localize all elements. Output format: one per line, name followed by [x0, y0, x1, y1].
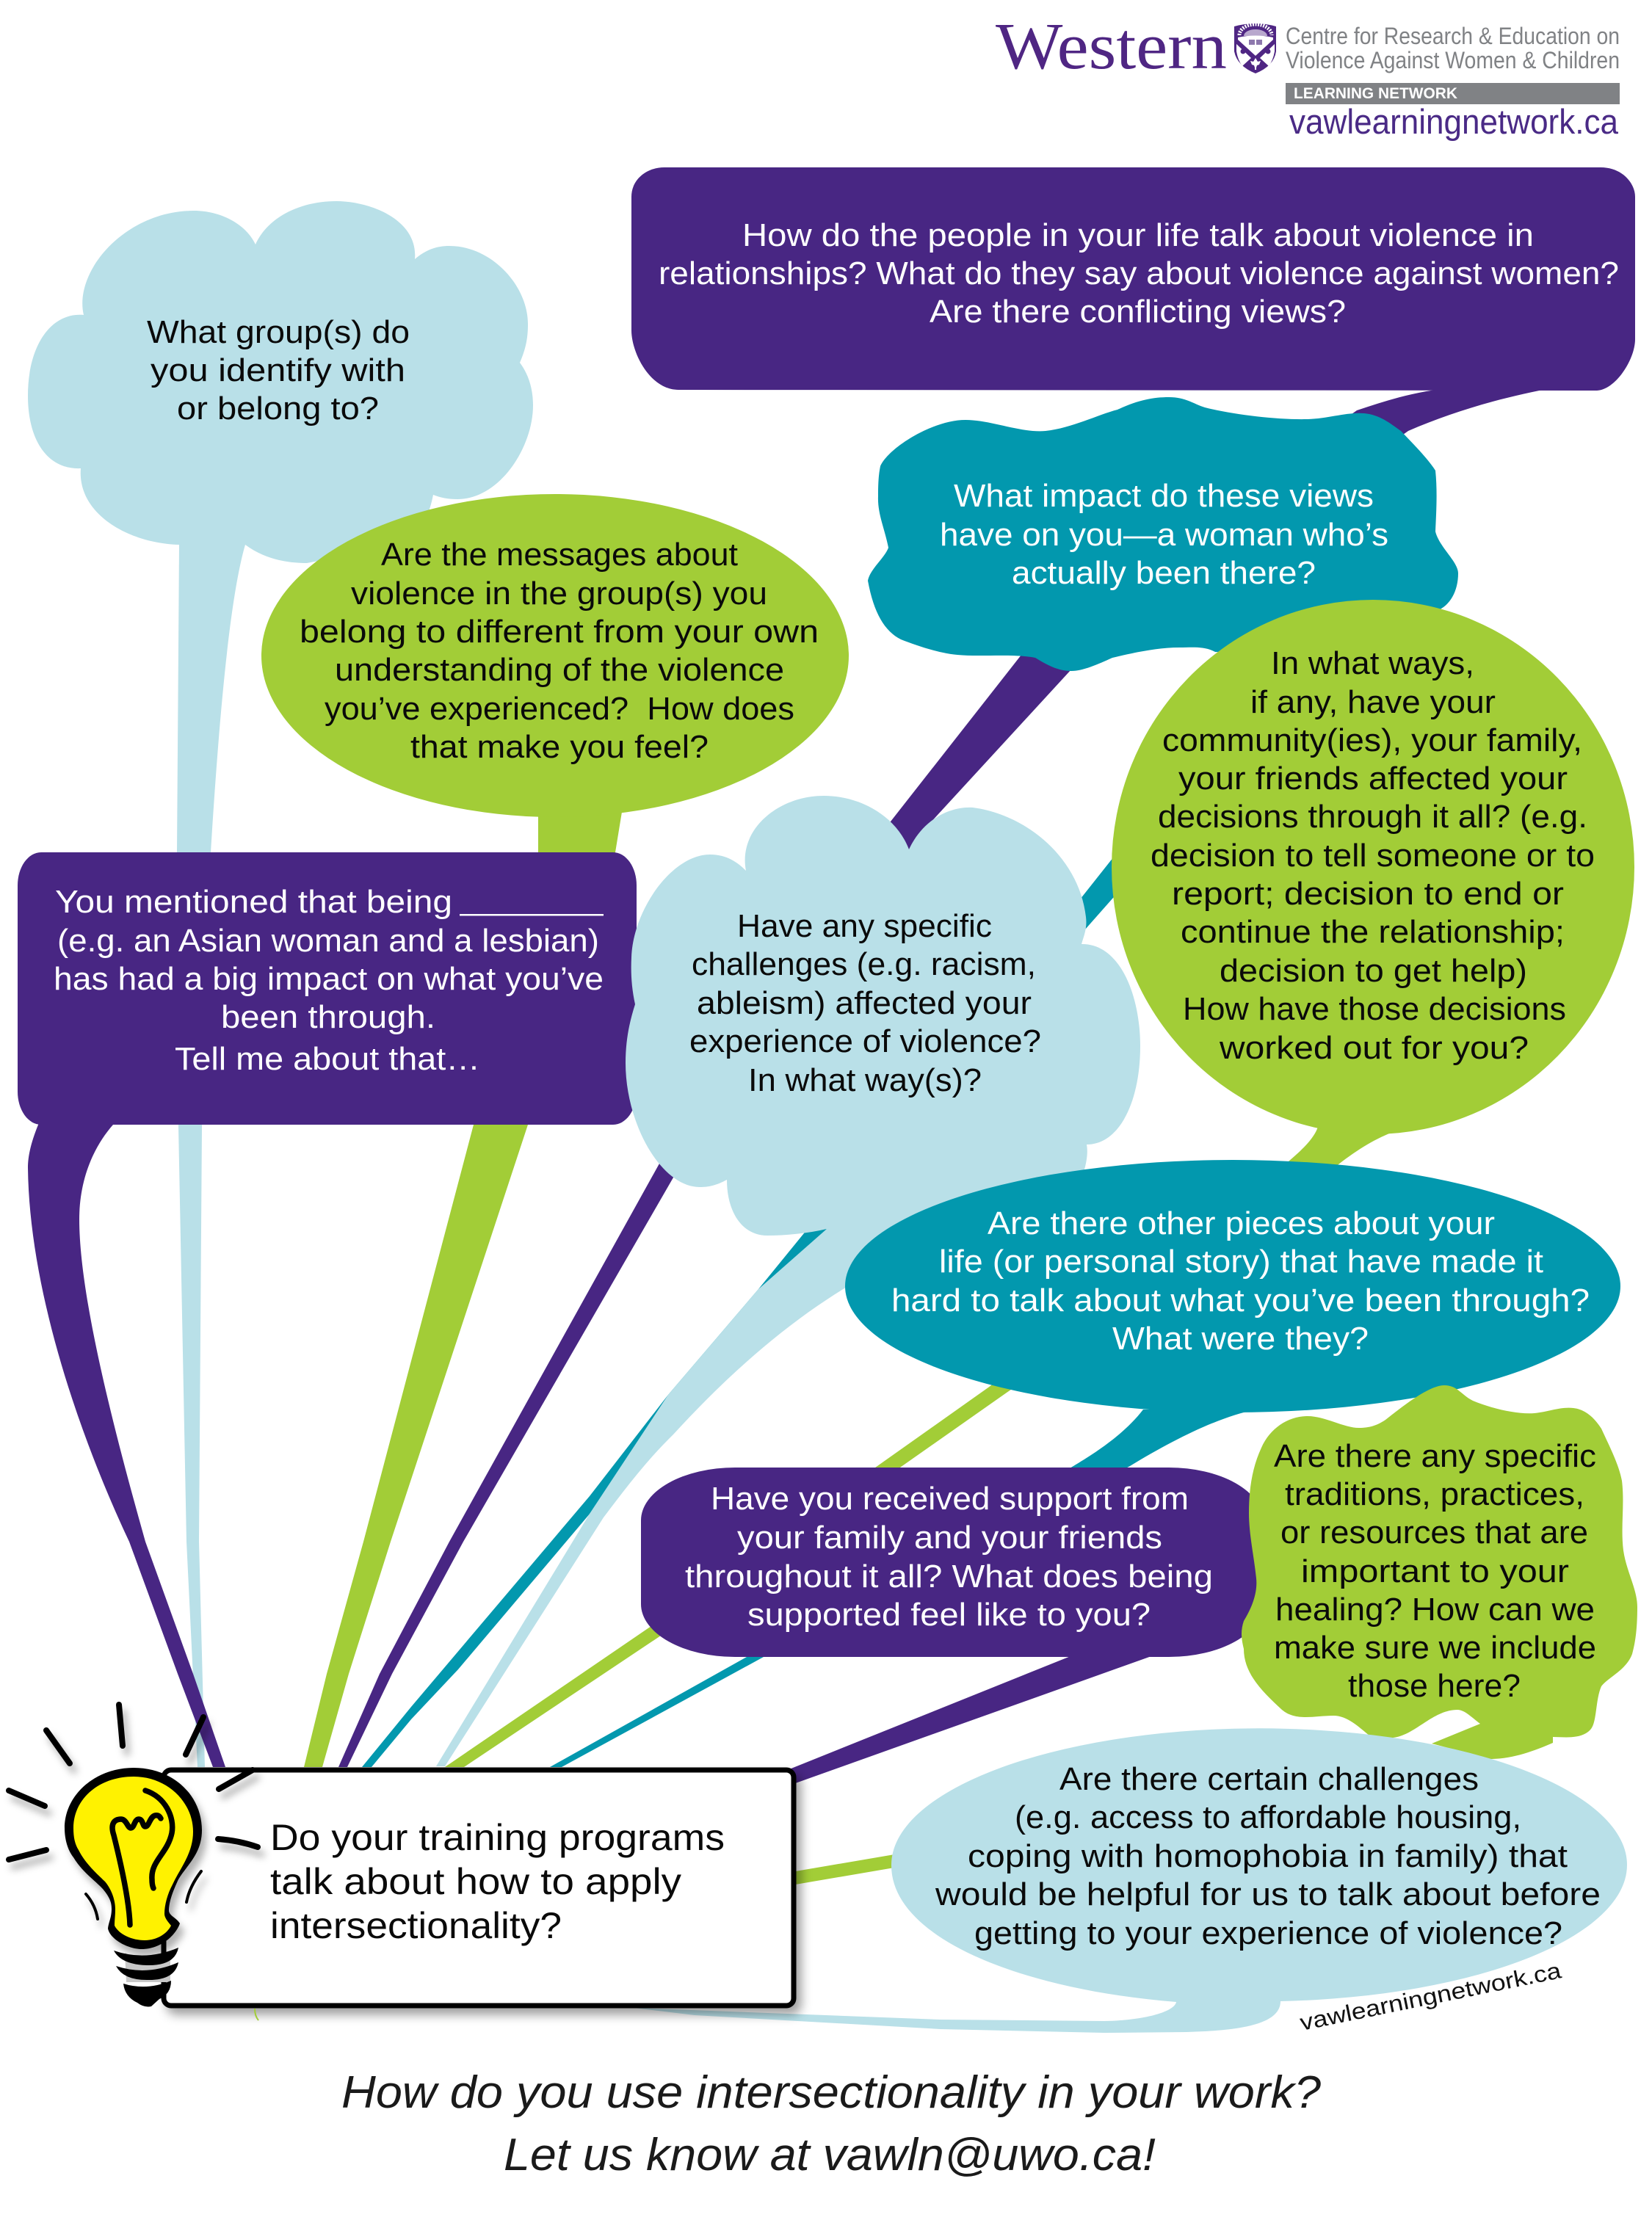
- text: has had a big impact on what you’ve: [54, 961, 604, 997]
- logo: Western University and Learning Network: [996, 10, 1620, 141]
- text: your family and your friends: [737, 1520, 1162, 1556]
- text: Have you received support from: [711, 1481, 1189, 1517]
- blob shape: [868, 397, 1458, 671]
- tail: green from traditions blob to box: [778, 1844, 954, 1887]
- text: hard to talk about what you’ve been through?: [891, 1283, 1590, 1318]
- text: How do the people in your life talk about violence in: [742, 217, 1534, 253]
- panel: blob, traditions: [1242, 1385, 1637, 1759]
- text: violence in the group(s) you: [351, 576, 767, 612]
- filament: [112, 1791, 173, 1925]
- text: you’ve experienced? How does: [325, 691, 794, 727]
- text: report; decision to end or: [1172, 876, 1564, 912]
- text: traditions, practices,: [1285, 1476, 1584, 1512]
- text: centre name: Violence Against Women & Children: [1286, 47, 1620, 73]
- text: actually been there?: [1012, 555, 1316, 591]
- tail: purple from support box to main box: [789, 1652, 1164, 1785]
- website, rotated: vawlearningnetwork.ca: [1297, 1957, 1564, 2036]
- text: [1274, 1438, 1596, 1704]
- blob shape: [1242, 1385, 1637, 1759]
- text: those here?: [1348, 1668, 1521, 1704]
- text: decision to tell someone or to: [1151, 838, 1595, 874]
- text: relationships? What do they say about violence against women?: [659, 255, 1619, 291]
- text: make sure we include: [1274, 1630, 1596, 1666]
- text: getting to your experience of violence?: [974, 1915, 1562, 1951]
- bulb glass outline: [65, 1768, 202, 1949]
- box outline: [164, 1770, 794, 2006]
- text: life (or personal story) that have made it: [939, 1244, 1543, 1280]
- tail: teal from impact bubble to box: [362, 697, 1285, 1767]
- text: [54, 884, 604, 1077]
- text: [270, 1817, 725, 1946]
- text: understanding of the violence: [335, 652, 784, 688]
- text: have on you—a woman who’s: [940, 517, 1388, 553]
- bulb glass fill: [73, 1777, 193, 1940]
- text: community(ies), your family,: [1162, 722, 1582, 758]
- text: centre name: Centre for Research & Education on: [1286, 23, 1620, 49]
- text: you identify with: [151, 352, 405, 388]
- circle shape: [1112, 600, 1634, 1134]
- text: talk about how to apply: [270, 1861, 681, 1902]
- text: or belong to?: [177, 391, 379, 427]
- text: centre name: [1286, 23, 1620, 73]
- text: decisions through it all? (e.g.: [1158, 799, 1587, 835]
- banner: learning network: [1286, 83, 1620, 104]
- text: What impact do these views: [954, 478, 1374, 514]
- text: What group(s) do: [147, 314, 410, 350]
- small green stroke below box: [255, 2009, 258, 2020]
- rounded box: [631, 167, 1635, 391]
- text: important to your: [1301, 1553, 1569, 1589]
- panel: cloud, specific challenges: [436, 796, 1140, 1766]
- text: healing? How can we: [1275, 1592, 1595, 1628]
- panel: main question box: [164, 1770, 794, 2020]
- icon: light bulb: [9, 1705, 258, 2006]
- panel: rounded box, support: [641, 1468, 1263, 1657]
- text: Tell me about that…: [175, 1041, 480, 1077]
- tail: green from decisions circle to box: [445, 1127, 1395, 1767]
- text: [300, 537, 819, 765]
- text: In what way(s)?: [748, 1062, 982, 1098]
- text: [935, 1761, 1601, 1951]
- icon: university crest: [1234, 23, 1276, 73]
- text: Do your training programs: [270, 1817, 725, 1858]
- text: that make you feel?: [410, 729, 709, 765]
- text: Are there conflicting views?: [930, 294, 1346, 330]
- text: decision to get help): [1220, 953, 1527, 989]
- cloud shape with tail: [28, 201, 533, 1767]
- text: [1151, 645, 1595, 1066]
- text: [659, 217, 1619, 330]
- text: Are there any specific: [1274, 1438, 1596, 1474]
- text: supported feel like to you?: [747, 1597, 1151, 1633]
- text: continue the relationship;: [1181, 914, 1565, 950]
- closing call to action: Let us know at vawln@uwo.ca!: [504, 2130, 1156, 2180]
- panel: box, you mentioned: [18, 852, 637, 1125]
- text: belong to different from your own: [300, 614, 819, 650]
- text: ableism) affected your: [697, 985, 1032, 1021]
- panel: ellipse, certain challenges: [634, 1728, 1627, 2033]
- text: challenges (e.g. racism,: [692, 946, 1036, 982]
- text: [689, 908, 1041, 1098]
- rounded box: [641, 1468, 1263, 1657]
- text: if any, have your: [1250, 684, 1496, 720]
- tail: purple from top question to box: [338, 388, 1555, 1767]
- tail: green from messages ellipse to box: [304, 808, 623, 1767]
- panel: circle, decisions: [1112, 600, 1634, 1134]
- ellipse shape: [845, 1160, 1620, 1412]
- text: Are there other pieces about your: [988, 1205, 1495, 1241]
- text: intersectionality?: [270, 1905, 562, 1946]
- ellipse shape with tail: [634, 1728, 1627, 2033]
- tail: purple from identity box to main box: [28, 1116, 225, 1767]
- panel: blob, impact of views: [868, 397, 1458, 671]
- website: vawlearningnetwork.ca: [1289, 102, 1619, 141]
- panel: cloud, what groups: [28, 201, 533, 1767]
- rounded box: [18, 852, 637, 1125]
- panel: ellipse, other pieces: [845, 1160, 1620, 1412]
- text: been through.: [221, 999, 435, 1035]
- closing call to action: [341, 2067, 1322, 2180]
- text: What were they?: [1112, 1321, 1369, 1357]
- closing call to action: How do you use intersectionality in your work?: [341, 2067, 1322, 2118]
- text: In what ways,: [1271, 645, 1474, 681]
- text: (e.g. an Asian woman and a lesbian): [57, 923, 599, 959]
- text: would be helpful for us to talk about before: [935, 1876, 1601, 1912]
- text: You mentioned that being: [55, 884, 452, 920]
- text: experience of violence?: [689, 1023, 1041, 1059]
- cloud shape with tail: [436, 796, 1140, 1766]
- text: or resources that are: [1280, 1515, 1588, 1550]
- text: coping with homophobia in family) that: [968, 1838, 1568, 1874]
- wordmark: Western: Western: [996, 10, 1227, 83]
- text: Are there certain challenges: [1059, 1761, 1479, 1797]
- banner: learning network: LEARNING NETWORK: [1294, 85, 1457, 102]
- rays: [9, 1705, 258, 1919]
- text: throughout it all? What does being: [685, 1559, 1213, 1595]
- tail: teal from other pieces ellipse to box: [550, 1410, 1256, 1767]
- ellipse shape: [261, 494, 849, 817]
- text: [147, 314, 410, 427]
- text: your friends affected your: [1178, 761, 1568, 797]
- text: How have those decisions: [1183, 991, 1566, 1027]
- panel: ellipse, messages about violence: [261, 494, 849, 817]
- panel: top box, how people talk: [631, 167, 1635, 391]
- text: [685, 1481, 1213, 1633]
- text: Are the messages about: [381, 537, 738, 573]
- text: worked out for you?: [1219, 1030, 1529, 1066]
- text: (e.g. access to affordable housing,: [1015, 1799, 1521, 1835]
- text: [940, 478, 1388, 591]
- text: [891, 1205, 1590, 1357]
- screw base: [114, 1948, 178, 2006]
- text: Have any specific: [737, 908, 992, 944]
